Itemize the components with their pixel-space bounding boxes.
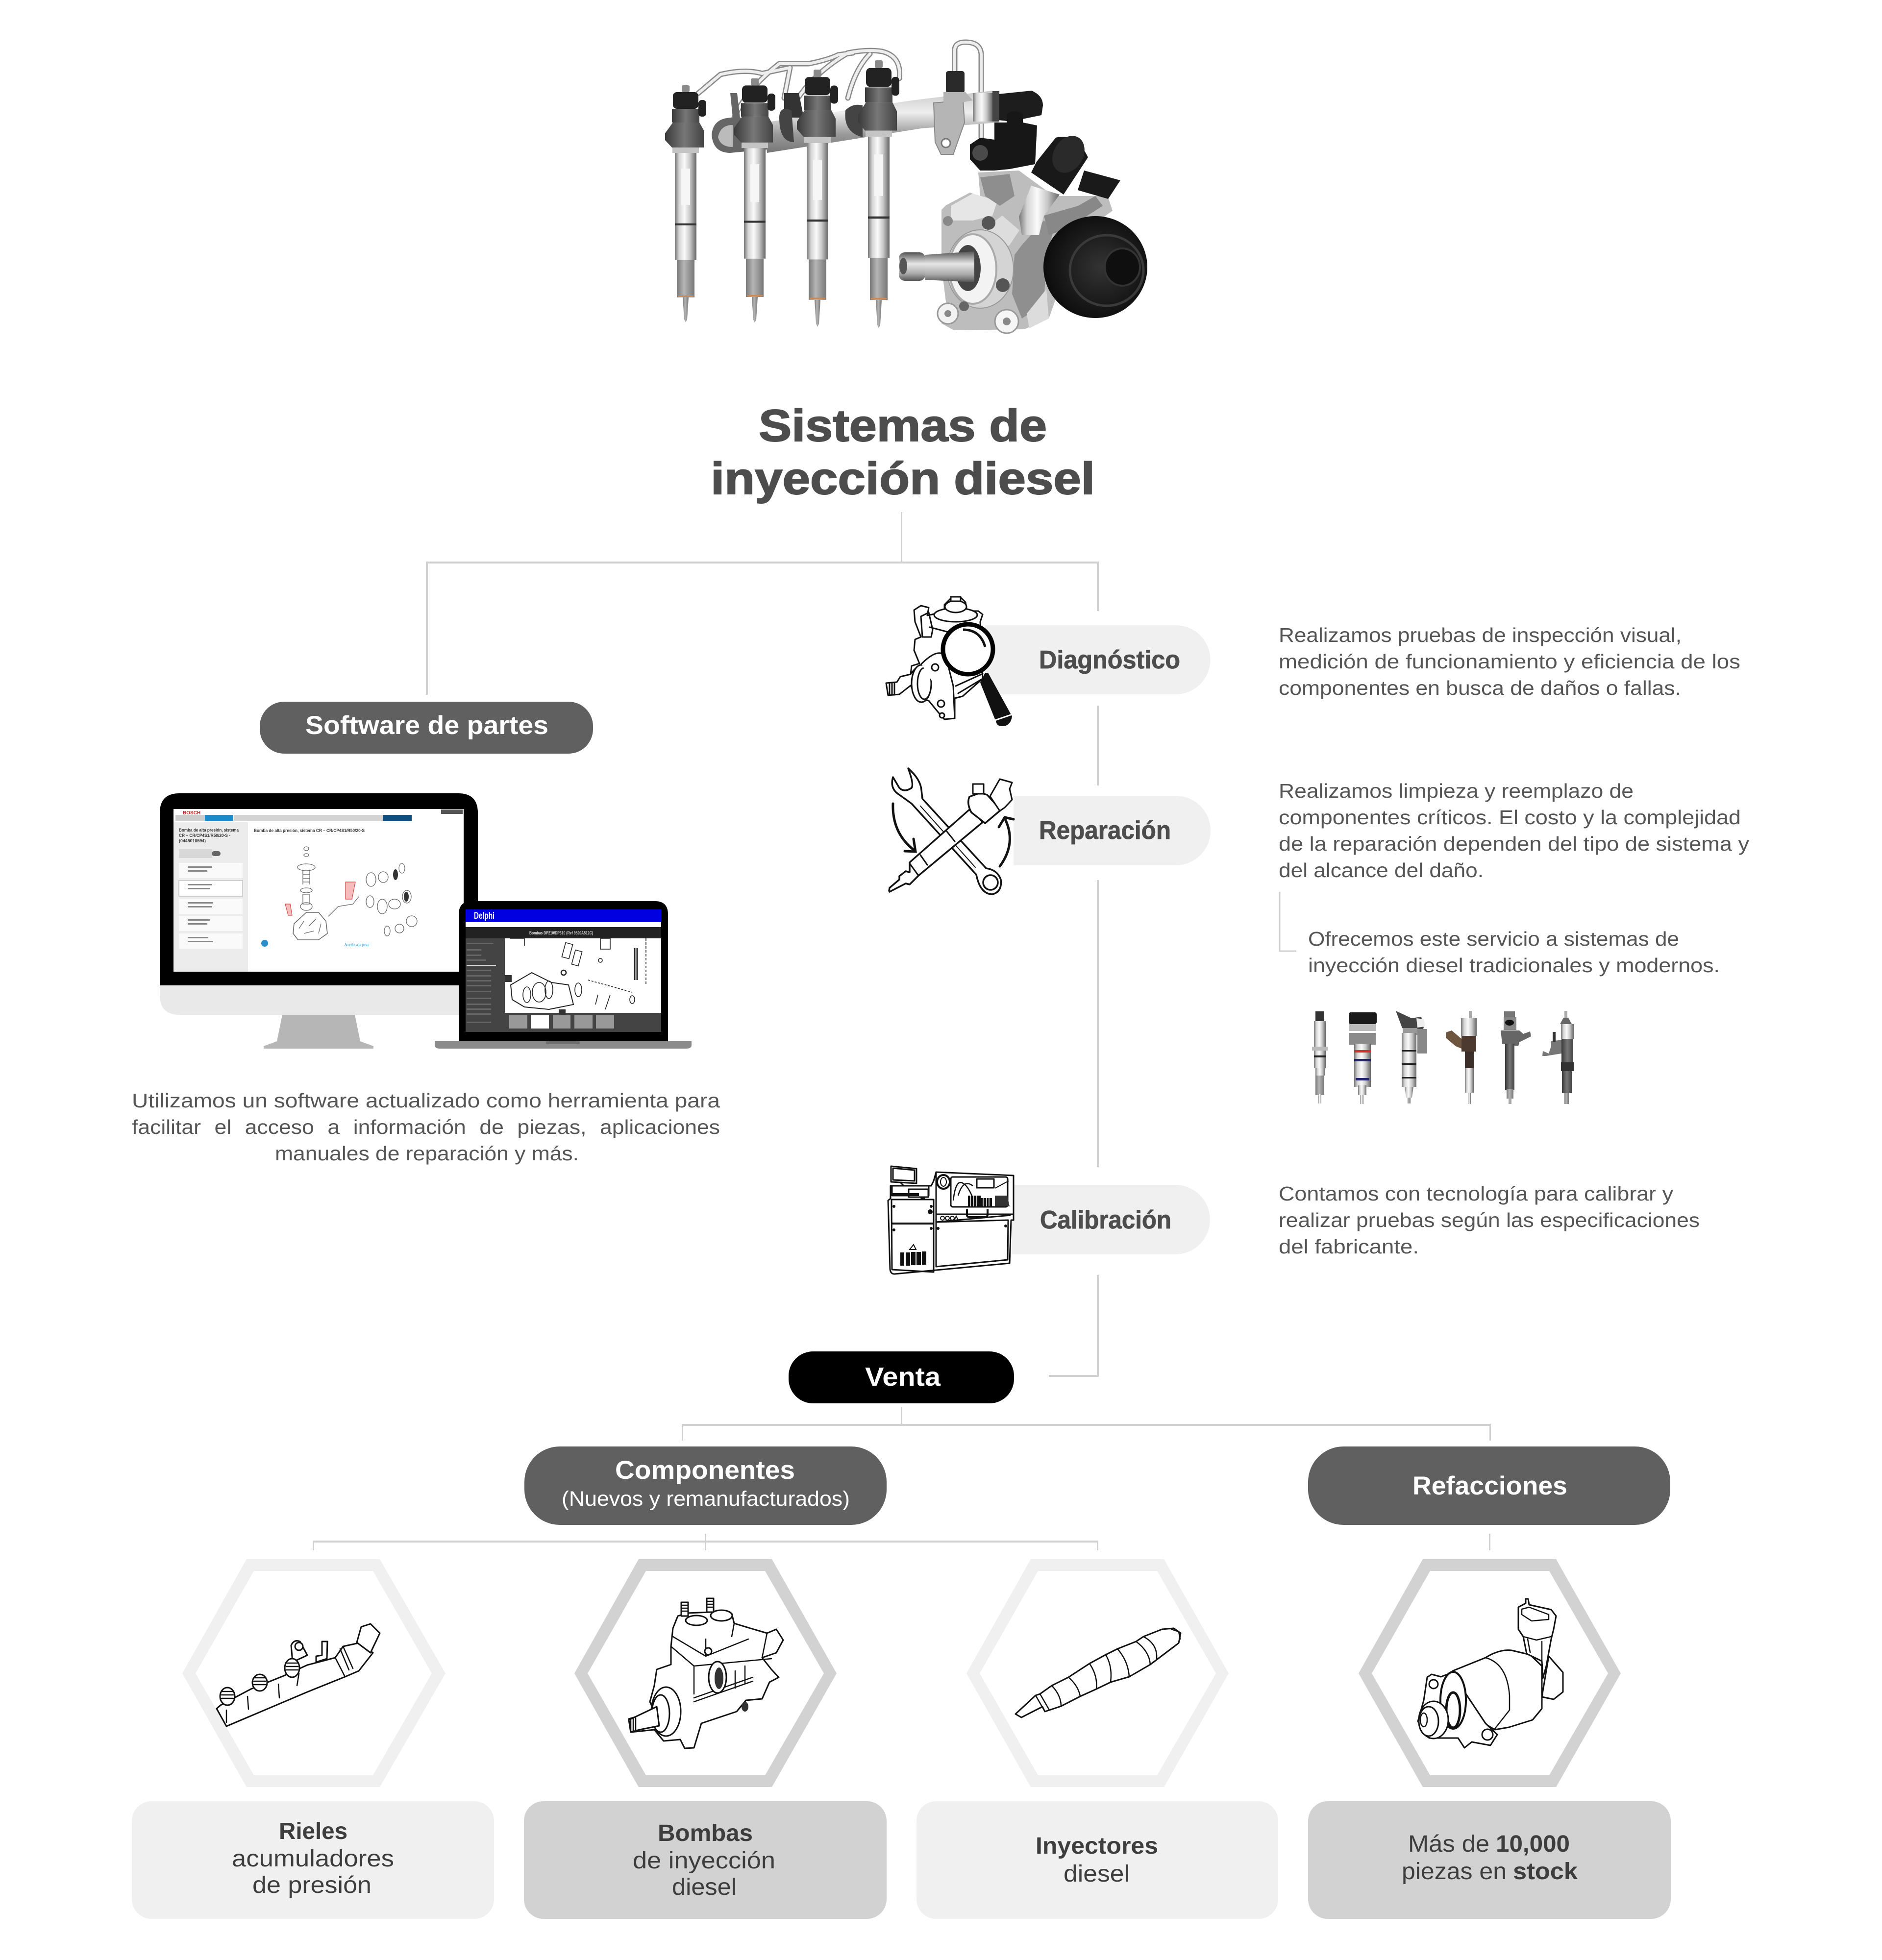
injector c [1396,1011,1427,1103]
text: sistemas tradicionales [1308,928,1720,977]
pill: reparacion: Reparación [1039,816,1171,845]
pump shaft [925,251,974,282]
pill: venta [789,1351,1014,1403]
text: reparacion: del alcance del daño. [1279,859,1484,882]
card: bombas: Bombas [658,1820,753,1846]
injector 1 [665,85,706,322]
rail [765,91,999,153]
pill: diagnostico [985,625,1210,694]
injector d [1446,1011,1477,1104]
monitor [160,793,478,1049]
wrench [892,768,1001,894]
injector 4 [858,60,899,328]
bench details [892,1197,1007,1231]
pill: calibracion [1012,1185,1210,1254]
laptop [435,901,692,1049]
black diagonal cylinder [1031,137,1088,195]
title [711,401,1095,504]
text: calibracion [1279,1182,1700,1258]
text: software description: Utilizamos un software actualizado como herramienta para [132,1089,720,1112]
text: software description: facilitar el acceso a información de piezas, aplicaciones [132,1116,720,1138]
card: rieles: acumuladores [232,1846,394,1872]
crossed injector [889,779,1012,892]
pill: refacciones: Refacciones [1412,1471,1567,1500]
card: refacciones stock: Más de [1408,1831,1489,1857]
injector 2 [734,78,775,323]
text: sistemas tradicionales: Ofrecemos este servicio a sistemas de [1308,928,1679,950]
card: refacciones stock [1308,1801,1671,1919]
injector e [1501,1011,1531,1104]
pump body [941,171,1113,330]
pill: diagnostico: Diagnóstico [1039,646,1180,674]
hexagon: inyectores [966,1559,1229,1787]
text: reparacion: de la reparación dependen del tipo de sistema y [1279,833,1750,855]
hexagon: rieles [182,1559,446,1787]
card: refacciones stock: 10,000 [1496,1831,1570,1857]
injector a [1312,1011,1328,1103]
icon: injector line art [1015,1628,1181,1717]
text: reparacion: componentes críticos. El costo y la complejidad [1279,806,1741,829]
Bosch software screen: CR – CR/CP4S1/R50/20-S - [179,833,230,838]
card: refacciones stock: piezas en [1402,1859,1507,1885]
hexagon: bombas [574,1559,837,1787]
text: reparacion: Realizamos limpieza y reemplazo de [1279,780,1634,802]
pill: calibracion: Calibración [1040,1206,1171,1234]
Bosch software screen: Bomba de alta presión, sistema CR – CR/CP4S1/R50/20-S [254,828,365,833]
pill: software de partes: Software de partes [305,711,548,740]
injector photo row [1312,1011,1574,1104]
icon: pump line art [629,1598,783,1748]
brackets behind injectors [712,93,767,153]
card: bombas: de inyección [633,1848,775,1874]
pill: software de partes [260,702,593,754]
Bosch software screen: (0445010594) [179,838,206,843]
text: calibracion: realizar pruebas según las especificaciones [1279,1209,1700,1231]
text: diagnostico: Realizamos pruebas de inspección visual, [1279,624,1682,646]
text: diagnostico: medición de funcionamiento y eficiencia de los [1279,650,1740,673]
pill: reparacion [1014,796,1211,865]
card: bombas: diesel [672,1874,737,1900]
card: rieles: Rieles [279,1818,347,1844]
hero photo: injectors, rail and pump [665,42,1147,333]
connector lines bottom [313,1407,1491,1550]
hexagon: refacciones [1359,1559,1621,1787]
text: diagnostico: componentes en busca de daños o fallas. [1279,677,1681,699]
icon: valve line art [1418,1599,1563,1748]
text: calibracion: Contamos con tecnología para calibrar y [1279,1182,1674,1205]
pump flange disc [947,230,1014,308]
text: software description: manuales de reparación y más. [275,1142,579,1165]
black rubber cover [1043,216,1147,318]
magnifier [943,624,1012,726]
injector f [1542,1011,1574,1104]
pill: venta: Venta [865,1362,941,1392]
card: refacciones stock: stock [1513,1859,1578,1885]
pill: componentes: Componentes [615,1456,795,1485]
exploded pump drawing [293,847,417,940]
pill: componentes: (Nuevos y remanufacturados) [562,1487,850,1511]
text: sistemas tradicionales: inyección diesel tradicionales y modernos. [1308,954,1720,977]
pill: refacciones [1308,1446,1670,1525]
text: software description [132,1089,720,1165]
Bosch software screen: Acceder a la pieza [345,942,369,947]
Bosch software screen: Bomba de alta presión, sistema [179,828,239,833]
card: bombas [524,1801,887,1919]
text: reparacion [1279,780,1750,882]
card: inyectores: Inyectores [1036,1833,1158,1859]
injector 3 [797,70,838,327]
card: inyectores: diesel [1064,1861,1130,1887]
card: rieles: de presión [252,1872,371,1898]
icon: pump under magnifier [886,597,1012,726]
icon: calibration bench [888,1166,1014,1274]
Bosch software screen: BOSCH [183,810,200,816]
title: inyección diesel [711,454,1095,504]
laptop: Delphi [474,911,495,921]
card: rieles [132,1801,494,1919]
connector lines top [426,512,1099,1377]
vent grille [900,1251,926,1266]
laptop: Bombas DP210/DP310 (Ref 9520A512C) [529,931,593,935]
pill: componentes [524,1446,887,1525]
devices: monitor and laptop [160,793,692,1049]
injector b [1349,1012,1377,1104]
Bosch software screen [173,809,463,972]
black sensor top [970,111,1037,171]
title: Sistemas de [759,401,1047,451]
arrows [893,804,1014,866]
card: inyectores [916,1801,1278,1919]
bracket connector [1280,892,1296,951]
text: calibracion: del fabricante. [1279,1235,1419,1258]
icon: rail line art [217,1624,380,1726]
text: diagnostico [1279,624,1740,699]
Delphi parts drawing [510,938,646,1009]
icon: wrench and injector crossed [889,768,1014,894]
